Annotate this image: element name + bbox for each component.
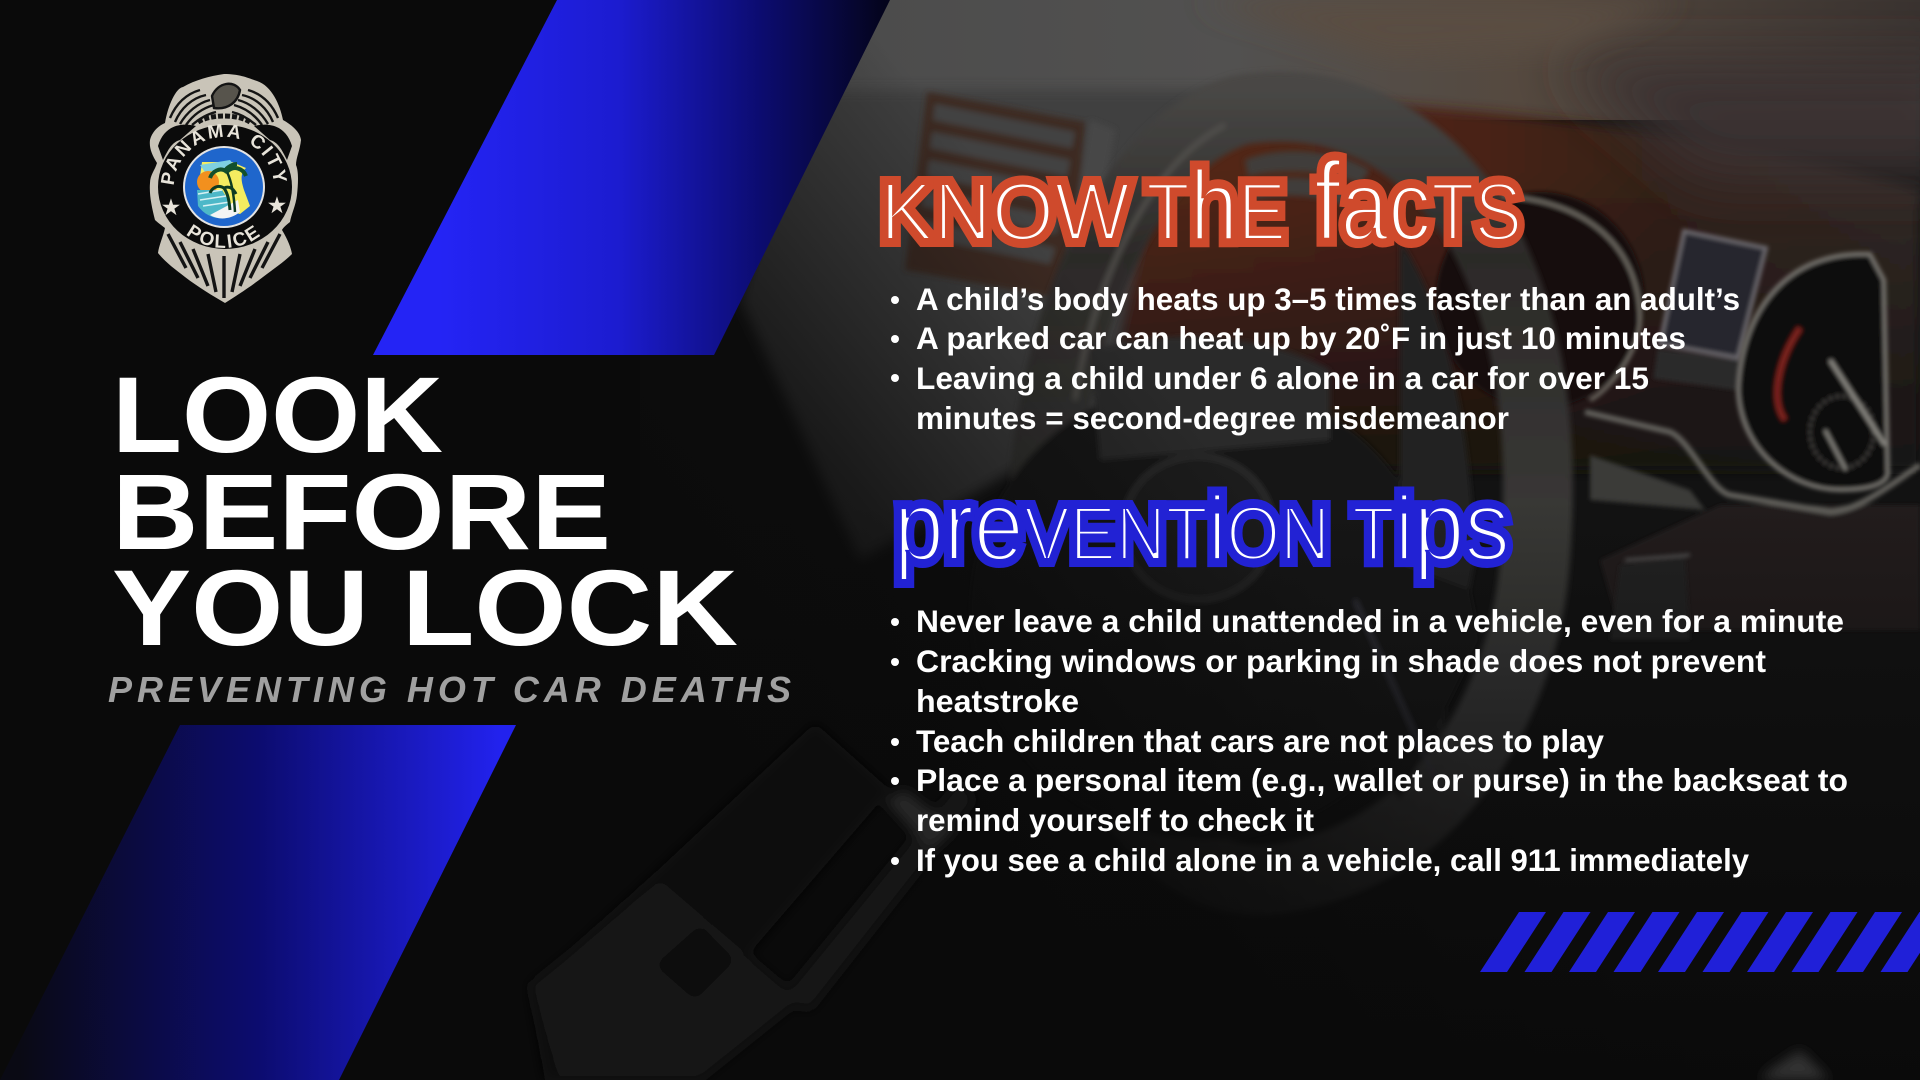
heading: prevention tips: Tips xyxy=(1352,470,1510,582)
badge seal xyxy=(183,146,265,228)
list: prevention tips: Place a personal item (e.g., wallet or purse) in the backseat to xyxy=(916,762,1848,798)
subtitle: PREVENTING HOT CAR DEATHS xyxy=(108,669,791,710)
badge text: ★ xyxy=(268,195,286,217)
heading: know the facts: facTS xyxy=(1314,139,1522,264)
list: know the facts: Leaving a child under 6 alone in a car for over 15 xyxy=(916,360,1649,396)
list: know the facts: minutes = second-degree misdemeanor xyxy=(916,400,1509,436)
badge text: POLICE xyxy=(186,224,260,248)
icon: Panama City Police badge xyxy=(150,74,301,303)
steering wheel xyxy=(970,107,1538,880)
top blue slanted panel xyxy=(373,0,890,355)
decorative dashboard trim xyxy=(1585,412,1920,630)
title: LOOK xyxy=(112,354,443,475)
lower laurel leaves xyxy=(168,234,280,298)
badge text: PANAMA CITY xyxy=(160,124,287,184)
list: prevention tips: remind yourself to check it xyxy=(916,802,1315,838)
list: prevention tips: Teach children that cars are not places to play xyxy=(916,723,1604,759)
heading: prevention tips: preVENTiON xyxy=(894,470,1330,582)
diagonal stripes accent xyxy=(1480,912,1920,972)
title: BEFORE xyxy=(112,451,611,572)
heading: know the facts: KNOW xyxy=(880,165,1131,258)
bottom blue slanted panel xyxy=(0,725,516,1080)
heading: know the facts: ThE xyxy=(1146,150,1286,262)
list: prevention tips xyxy=(891,603,1848,878)
badge text: ★ xyxy=(162,197,180,219)
icon: left instrument gauge xyxy=(1436,192,1644,408)
gear console xyxy=(530,723,1830,1080)
icon: air vents xyxy=(905,92,1370,320)
list: know the facts: A parked car can heat up by 20˚F in just 10 minutes xyxy=(916,320,1686,356)
eagle xyxy=(170,84,278,125)
badge scroll and shield field xyxy=(158,125,292,249)
heading: prevention tips: preVENTiON xyxy=(894,470,1330,582)
heading: know the facts: ThE xyxy=(1146,150,1286,262)
heading: know the facts: facTS xyxy=(1314,139,1522,264)
heading: prevention tips: Tips xyxy=(1352,470,1510,582)
title xyxy=(112,354,738,668)
list: prevention tips: heatstroke xyxy=(916,683,1079,719)
list: prevention tips: Never leave a child unattended in a vehicle, even for a minute xyxy=(916,603,1844,639)
icon: right speedometer xyxy=(1738,254,1888,490)
list: know the facts xyxy=(891,281,1740,436)
title: YOU LOCK xyxy=(112,547,738,668)
list: prevention tips: Cracking windows or parking in shade does not prevent xyxy=(916,643,1767,679)
icon: centre display xyxy=(1653,231,1766,390)
badge text xyxy=(160,124,287,248)
stalk control xyxy=(1610,555,1690,640)
list: know the facts: A child’s body heats up 3–5 times faster than an adult’s xyxy=(916,281,1740,317)
heading: know the facts xyxy=(880,139,1522,264)
list: prevention tips: If you see a child alone in a vehicle, call 911 immediately xyxy=(916,842,1749,878)
heading: know the facts: KNOW xyxy=(880,165,1131,258)
